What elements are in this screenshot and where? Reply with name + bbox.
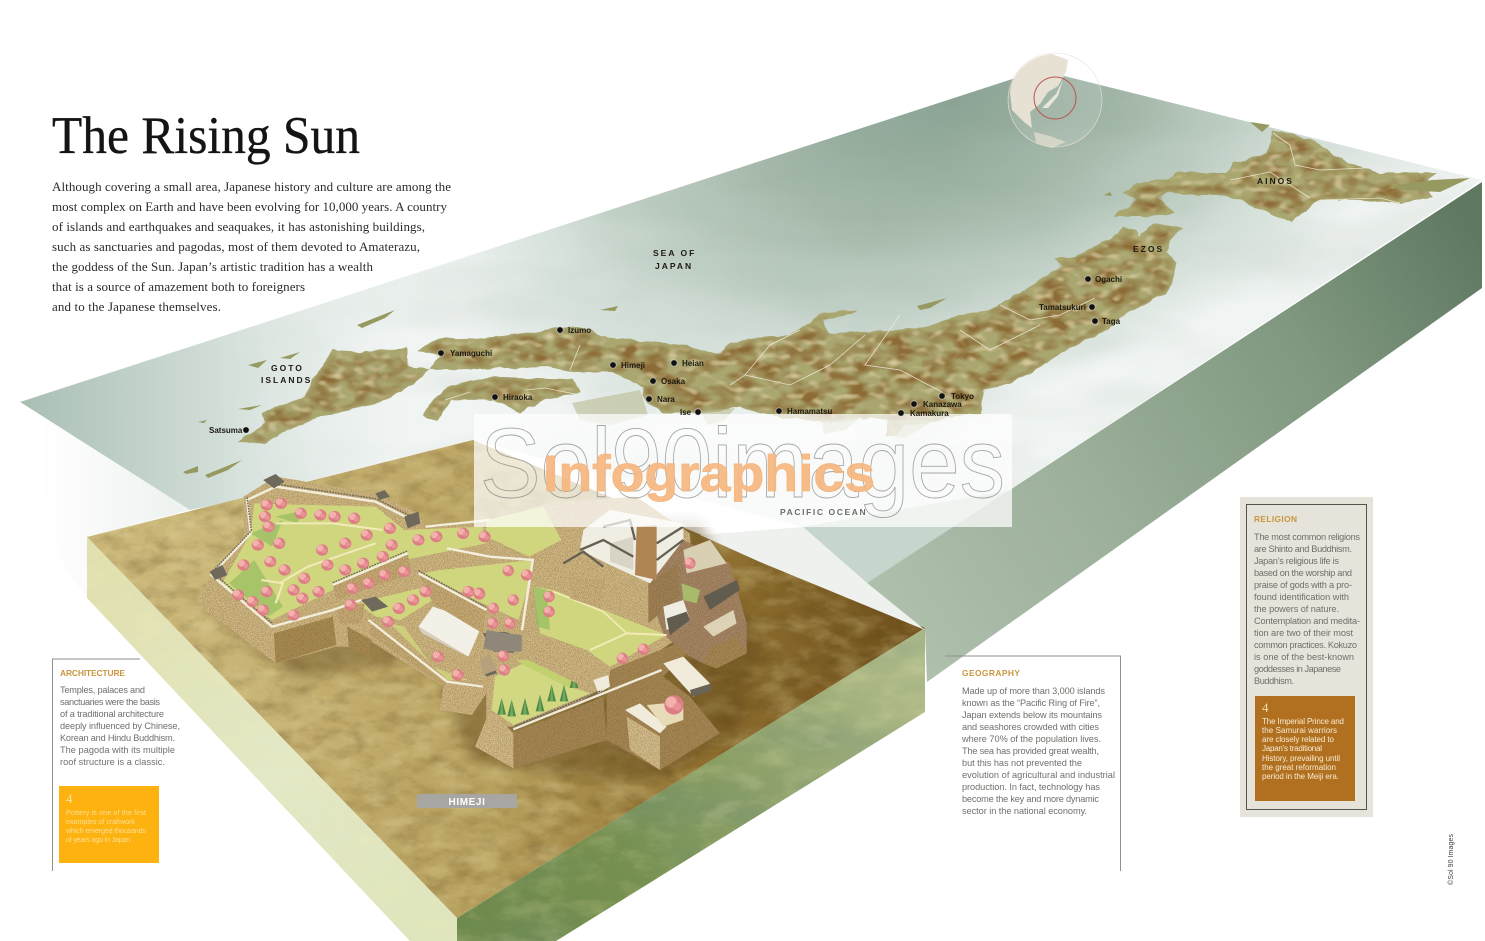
east lawn bbox=[533, 587, 667, 667]
title: The Rising Sun bbox=[52, 107, 360, 165]
light beam from castle to map bbox=[700, 527, 925, 630]
intro paragraph: most complex on Earth and have been evolving for 10,000 years. A country bbox=[52, 199, 448, 214]
globe locator bbox=[1008, 53, 1102, 148]
architecture callout: 4 bbox=[66, 791, 73, 806]
moat pool bbox=[418, 607, 483, 657]
religion text: is one of the best-known bbox=[1254, 652, 1354, 662]
architecture text: sanctuaries were the basis bbox=[60, 697, 160, 707]
religion text: praise of gods with a pro- bbox=[1254, 580, 1352, 590]
cherry trees east bbox=[474, 558, 696, 715]
religion text: Japan’s religious life is bbox=[1254, 556, 1339, 566]
architecture callout: examples of craftwork bbox=[66, 817, 135, 826]
white parapets bbox=[211, 487, 533, 687]
intro paragraph: and to the Japanese themselves. bbox=[52, 299, 221, 314]
architecture text: Temples, palaces and bbox=[60, 685, 145, 695]
religion callout: The Imperial Prince and bbox=[1262, 717, 1344, 726]
castle label: Himeji: HIMEJI bbox=[449, 797, 485, 808]
map labels: regions: JAPAN bbox=[655, 261, 693, 271]
pines bbox=[497, 671, 578, 716]
map labels: regions: ISLANDS bbox=[261, 375, 312, 385]
religion text: goddesses in Japanese bbox=[1254, 664, 1341, 674]
architecture heading: ARCHITECTURE bbox=[60, 668, 125, 678]
geography text: The sea has provided great wealth, bbox=[962, 746, 1099, 756]
geography heading: GEOGRAPHY bbox=[962, 668, 1020, 678]
map labels: cities: Hamamatsu bbox=[787, 407, 832, 416]
map labels: regions: PACIFIC OCEAN bbox=[780, 507, 867, 517]
map labels: cities: Kanazawa bbox=[923, 400, 962, 409]
watermark: orange brand: Infographics bbox=[543, 445, 875, 502]
copyright: ©Sol 90 Images bbox=[1447, 834, 1455, 885]
map slab: translucent left wall bbox=[20, 402, 190, 598]
castle west part bbox=[197, 474, 697, 727]
island: Shikoku bbox=[423, 377, 580, 420]
geography text: become the key and more dynamic bbox=[962, 794, 1099, 804]
religion text: found identification with bbox=[1254, 592, 1349, 602]
panel: religion bbox=[1240, 497, 1373, 817]
geography text: Made up of more than 3,000 islands bbox=[962, 686, 1105, 696]
geography text: production. In fact, technology has bbox=[962, 782, 1100, 792]
religion heading: RELIGION bbox=[1254, 514, 1297, 524]
architecture callout bbox=[59, 786, 159, 863]
lawns bbox=[222, 503, 561, 680]
turrets bbox=[210, 474, 520, 677]
map labels: cities: Ogachi bbox=[1095, 275, 1122, 284]
geography text: but this has not prevented the bbox=[962, 758, 1082, 768]
map labels: cities: Hiraoka bbox=[503, 393, 533, 402]
religion text: common practices. Kokuzo bbox=[1254, 640, 1357, 650]
panel: architecture bbox=[52, 659, 182, 871]
map labels: cities: Kamakura bbox=[910, 409, 949, 418]
geography text: evolution of agricultural and industrial bbox=[962, 770, 1115, 780]
small islands bbox=[183, 122, 1470, 478]
geography text: and seashores crowded with cities bbox=[962, 722, 1099, 732]
Himeji castle illustration bbox=[197, 474, 747, 770]
map labels: cities: Taga bbox=[1102, 317, 1121, 326]
map labels: cities: Yamaguchi bbox=[450, 349, 492, 358]
watermark bbox=[474, 408, 1012, 527]
south lawns bbox=[492, 663, 590, 725]
map slab: right side wall bbox=[867, 182, 1482, 682]
map labels: cities: Izumo bbox=[568, 326, 591, 335]
religion text: the powers of nature. bbox=[1254, 604, 1339, 614]
watermark: outlined brand: Sol90images bbox=[480, 408, 1005, 518]
religion callout: are closely related to bbox=[1262, 735, 1335, 744]
religion callout: period in the Meiji era. bbox=[1262, 772, 1339, 781]
garden paths bbox=[261, 523, 383, 603]
panel: geography bbox=[945, 656, 1120, 871]
religion callout: History, prevailing until bbox=[1262, 754, 1340, 763]
map slab: sea surface bbox=[0, 60, 1485, 590]
map labels: regions: GOTO bbox=[271, 363, 304, 373]
castle east part bbox=[474, 510, 747, 770]
architecture callout: of years ago in Japan. bbox=[66, 835, 132, 844]
island: Honshu bbox=[416, 223, 1183, 436]
south wall bbox=[475, 637, 747, 770]
geography text: known as the “Pacific Ring of Fire”, bbox=[962, 698, 1100, 708]
cherry blossoms bbox=[232, 498, 491, 681]
religion callout: 4 bbox=[1262, 700, 1269, 715]
architecture text: The pagoda with its multiple bbox=[60, 745, 175, 755]
architecture callout: which emerged thousands bbox=[65, 826, 146, 835]
bastions and roofs bbox=[480, 540, 740, 733]
architecture text: of a traditional architecture bbox=[60, 709, 164, 719]
geography text: sector in the national economy. bbox=[962, 806, 1087, 816]
religion text: The most common religions bbox=[1254, 532, 1360, 542]
architecture callout: Pottery is one of the first bbox=[66, 808, 146, 817]
geography text: where 70% of the population lives. bbox=[961, 734, 1101, 744]
religion text: Contemplation and medita- bbox=[1254, 616, 1360, 626]
castle block: left wall bbox=[80, 535, 460, 941]
religion callout: Japan’s traditional bbox=[1262, 744, 1322, 753]
pale peninsulas fading to the Pacific bbox=[572, 390, 935, 438]
religion text: are Shinto and Buddhism. bbox=[1254, 544, 1352, 554]
map labels: regions bbox=[261, 176, 1294, 517]
architecture text: Korean and Hindu Buddhism. bbox=[60, 733, 175, 743]
intro paragraph: such as sanctuaries and pagodas, most of them devoted to Amaterazu, bbox=[52, 239, 420, 254]
intro paragraph: that is a source of amazement both to foreigners bbox=[52, 279, 305, 294]
map labels: regions: EZOS bbox=[1133, 244, 1164, 254]
map labels: cities: Heian bbox=[682, 359, 704, 368]
map labels: cities: Tokyo bbox=[951, 392, 974, 401]
map labels: cities: Osaka bbox=[661, 377, 686, 386]
religion callout: the great reformation bbox=[1262, 763, 1336, 772]
inner stone walls bbox=[513, 563, 680, 690]
island: Hokkaido bbox=[1113, 130, 1437, 223]
map labels: cities: Nara bbox=[657, 395, 675, 404]
island: Kyushu bbox=[237, 348, 430, 443]
religion text: based on the worship and bbox=[1254, 568, 1352, 578]
north-east wall cluster bbox=[647, 540, 747, 668]
intro paragraph: the goddess of the Sun. Japan’s artistic tradition has a wealth bbox=[52, 259, 374, 274]
map labels: cities: Satsuma bbox=[209, 426, 243, 435]
rivers bbox=[445, 133, 1400, 400]
architecture text: roof structure is a classic. bbox=[60, 757, 165, 767]
map labels: cities: Tamatsukuri bbox=[1039, 303, 1086, 312]
locator ring bbox=[1034, 77, 1076, 119]
grey roof ridges bbox=[212, 484, 486, 623]
castle label: Himeji bbox=[417, 794, 517, 808]
map labels: regions: AINOS bbox=[1257, 176, 1294, 186]
darker wall faces bbox=[274, 617, 372, 663]
castle shadow bbox=[210, 520, 760, 780]
south parapet bbox=[513, 670, 662, 729]
religion text: tion are two of their most bbox=[1254, 628, 1353, 638]
map labels: cities bbox=[209, 275, 1122, 435]
intro paragraph: of islands and earthquakes and seaquakes, it has astonishing buildings, bbox=[52, 219, 425, 234]
darker green patches bbox=[229, 510, 411, 617]
map labels: cities: Ise bbox=[680, 408, 692, 417]
castle block: top surface bbox=[80, 435, 930, 935]
map labels: cities: Himeji bbox=[621, 361, 645, 370]
map of Japan: land masses bbox=[237, 130, 1437, 443]
architecture text: deeply influenced by Chinese, bbox=[60, 721, 180, 731]
geography text: Japan extends below its mountains bbox=[962, 710, 1102, 720]
map labels: regions: SEA OF bbox=[653, 248, 696, 258]
religion text: Buddhism. bbox=[1254, 676, 1294, 686]
main keep bbox=[563, 510, 683, 583]
religion callout: the Samurai warriors bbox=[1262, 726, 1337, 735]
religion callout bbox=[1255, 696, 1355, 801]
stone base bbox=[197, 477, 697, 727]
inner stone walls bbox=[333, 553, 486, 687]
castle block: right wall bbox=[450, 625, 930, 941]
intro paragraph: Although covering a small area, Japanese history and culture are among the bbox=[52, 179, 451, 194]
